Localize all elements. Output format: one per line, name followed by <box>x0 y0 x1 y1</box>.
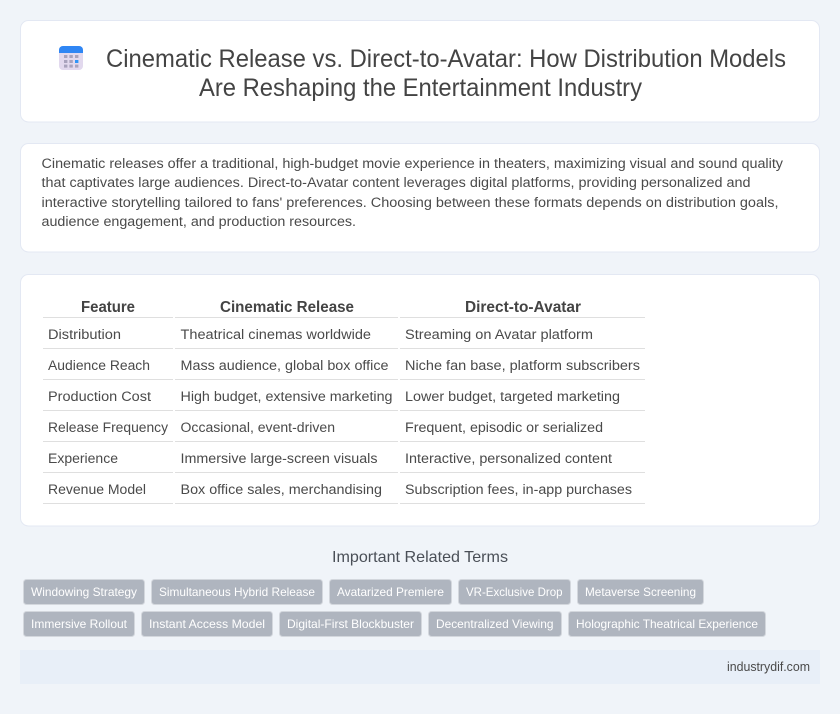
heading: title: Cinematic Release vs. Direct-to-Avatar: How Distribution Models <box>106 45 786 73</box>
table row: audience reach: Niche fan base, platform subscribers <box>405 358 640 374</box>
text block: intro paragraph: interactive storytelling tailored to fans' preferences. Choosing between these formats depends on distribution goals, <box>42 195 778 211</box>
table row: production cost: High budget, extensive marketing <box>180 389 392 405</box>
table row: revenue model: Subscription fees, in-app purchases <box>405 482 632 498</box>
table row: experience: Immersive large-screen visuals <box>180 451 378 467</box>
table header: Cinematic Release <box>220 299 354 316</box>
tag: metaverse screening: Metaverse Screening <box>585 585 696 599</box>
tag: holographic theatrical experience <box>568 612 766 636</box>
table row: audience reach <box>48 358 640 374</box>
table row: revenue model <box>48 482 632 498</box>
tag: instant access model <box>142 612 272 636</box>
panel: comparison table <box>20 274 820 526</box>
tag: digital-first blockbuster <box>280 612 422 636</box>
table row: release frequency <box>48 420 603 436</box>
tag: immersive rollout: Immersive Rollout <box>31 617 128 631</box>
tag: avatarized premiere <box>330 580 452 604</box>
table row: revenue model: Box office sales, merchandising <box>180 482 382 498</box>
footer bar <box>20 650 820 684</box>
table row: production cost: Lower budget, targeted marketing <box>405 389 620 405</box>
table row: experience: Experience <box>48 451 118 467</box>
table row: revenue model: Revenue Model <box>48 482 146 498</box>
table row: audience reach: Audience Reach <box>48 358 150 374</box>
tag: simultaneous hybrid release: Simultaneous Hybrid Release <box>159 585 315 599</box>
tag: vr-exclusive drop: VR-Exclusive Drop <box>466 585 563 599</box>
tag: decentralized viewing: Decentralized Viewing <box>436 617 554 631</box>
table row: production cost: Production Cost <box>48 389 151 405</box>
text block: intro paragraph <box>42 156 784 230</box>
tag: simultaneous hybrid release <box>152 580 322 604</box>
tag: digital-first blockbuster: Digital-First Blockbuster <box>287 617 414 631</box>
tag: avatarized premiere: Avatarized Premiere <box>337 585 444 599</box>
tag row 1 <box>24 580 704 604</box>
footer text: industrydif.com <box>727 660 810 674</box>
heading: related terms: Important Related Terms <box>332 549 508 566</box>
table header: Direct-to-Avatar <box>465 299 581 316</box>
tag: metaverse screening <box>578 580 704 604</box>
panel: intro text <box>20 144 820 252</box>
table row: experience <box>48 451 612 467</box>
text block: intro paragraph: audience engagement, and production resources. <box>42 214 356 230</box>
table row: distribution <box>48 327 593 343</box>
table row: release frequency: Release Frequency <box>48 420 169 436</box>
table header: Feature <box>81 299 135 316</box>
table row: audience reach: Mass audience, global box office <box>180 358 389 374</box>
tag: windowing strategy <box>24 580 144 604</box>
tag: instant access model: Instant Access Model <box>149 617 265 631</box>
tag: decentralized viewing <box>428 612 562 636</box>
tag: holographic theatrical experience: Holographic Theatrical Experience <box>576 617 758 631</box>
tag row 2 <box>24 612 766 636</box>
table row: release frequency: Occasional, event-driven <box>180 420 335 436</box>
heading: title <box>106 45 786 102</box>
table row: release frequency: Frequent, episodic or serialized <box>405 420 603 436</box>
table header <box>81 299 581 316</box>
table row: experience: Interactive, personalized content <box>405 451 612 467</box>
table row: production cost <box>48 389 620 405</box>
table row: distribution: Distribution <box>48 327 121 343</box>
table row: distribution: Streaming on Avatar platform <box>405 327 593 343</box>
tag: immersive rollout <box>24 612 134 636</box>
tag: windowing strategy: Windowing Strategy <box>31 585 137 599</box>
panel: title card <box>20 20 820 122</box>
heading: title: Are Reshaping the Entertainment Industry <box>199 74 642 102</box>
table rules <box>43 317 645 504</box>
text block: intro paragraph: Cinematic releases offer a traditional, high-budget movie experience in theaters, maximizing visual and sound quality <box>42 156 784 172</box>
text block: intro paragraph: that captivates large audiences. Direct-to-Avatar content leverages digital platforms, providing personalized and <box>42 175 751 191</box>
table row: distribution: Theatrical cinemas worldwide <box>180 327 371 343</box>
tag: vr-exclusive drop <box>458 580 570 604</box>
icon: calendar <box>59 46 83 70</box>
